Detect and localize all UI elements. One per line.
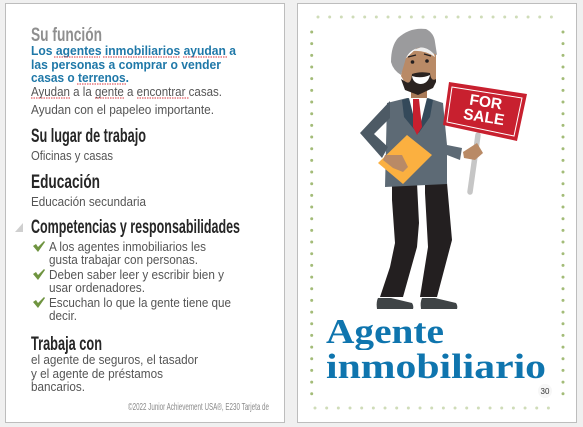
page number: 30 <box>541 387 550 396</box>
shoes <box>377 298 457 309</box>
illustration: real estate agent <box>360 29 527 309</box>
page number <box>538 384 552 398</box>
heading: Su función: Su función <box>31 25 102 46</box>
beard <box>401 72 436 95</box>
icon: check 1 <box>33 241 45 252</box>
key message: casas o terrenos. <box>31 71 129 85</box>
dotted border <box>312 17 563 408</box>
smile <box>412 75 430 84</box>
key message: Los agentes inmobiliarios ayudan a <box>31 44 237 58</box>
skills list: Escuchan lo que la gente tiene que <box>49 296 231 310</box>
shirt <box>408 98 428 134</box>
function description <box>31 85 222 117</box>
folder <box>378 135 432 184</box>
heading: Su lugar de trabajo: Su lugar de trabajo <box>31 126 146 147</box>
heading: Educación: Educación <box>31 172 100 193</box>
colleagues text: el agente de seguros, el tasador <box>31 353 198 367</box>
right hand <box>463 143 483 160</box>
key message <box>31 44 237 85</box>
left hand <box>383 155 408 172</box>
tie <box>413 99 422 135</box>
sign <box>443 82 527 141</box>
sign pole <box>470 135 478 192</box>
title <box>326 312 551 386</box>
jacket <box>360 98 462 187</box>
function description: Ayudan a la gente a encontrar casas. <box>31 85 222 99</box>
education text: Educación secundaria <box>31 195 146 209</box>
head <box>391 29 437 95</box>
heading: Competencias y responsabilidades: Competencias y responsabilidades <box>31 217 240 238</box>
colleagues text <box>31 353 198 394</box>
skills list <box>33 240 231 323</box>
neck <box>411 88 427 100</box>
heading: Trabaja con: Trabaja con <box>31 334 102 355</box>
icon: check 3 <box>33 297 45 308</box>
collapse triangle <box>15 223 23 232</box>
skills list: Deben saber leer y escribir bien y <box>49 268 225 282</box>
skills list: gusta trabajar con personas. <box>49 253 198 267</box>
key message: las personas a comprar o vender <box>31 58 221 72</box>
colleagues text: bancarios. <box>31 380 85 394</box>
colleagues text: y el agente de préstamos <box>31 367 163 381</box>
footer copyright: ©2022 Junior Achievement USA®, E230 Tarjeta de <box>128 402 269 413</box>
eyes and brows <box>411 60 414 64</box>
turban <box>391 29 437 75</box>
skills list: A los agentes inmobiliarios les <box>49 240 206 254</box>
skills list: decir. <box>49 309 77 323</box>
panel: job details <box>6 4 284 422</box>
title: Agente <box>326 312 444 351</box>
title: inmobiliario <box>326 347 546 386</box>
face <box>401 47 436 92</box>
sign: FOR <box>468 92 503 114</box>
function description: Ayudan con el papeleo importante. <box>31 103 214 117</box>
sign: SALE <box>462 106 505 129</box>
workplace text: Oficinas y casas <box>31 149 113 163</box>
skills list: usar ordenadores. <box>49 281 145 295</box>
trousers <box>380 183 452 297</box>
lapels <box>402 98 433 134</box>
panel: career card <box>298 4 576 422</box>
icon: check 2 <box>33 269 45 280</box>
